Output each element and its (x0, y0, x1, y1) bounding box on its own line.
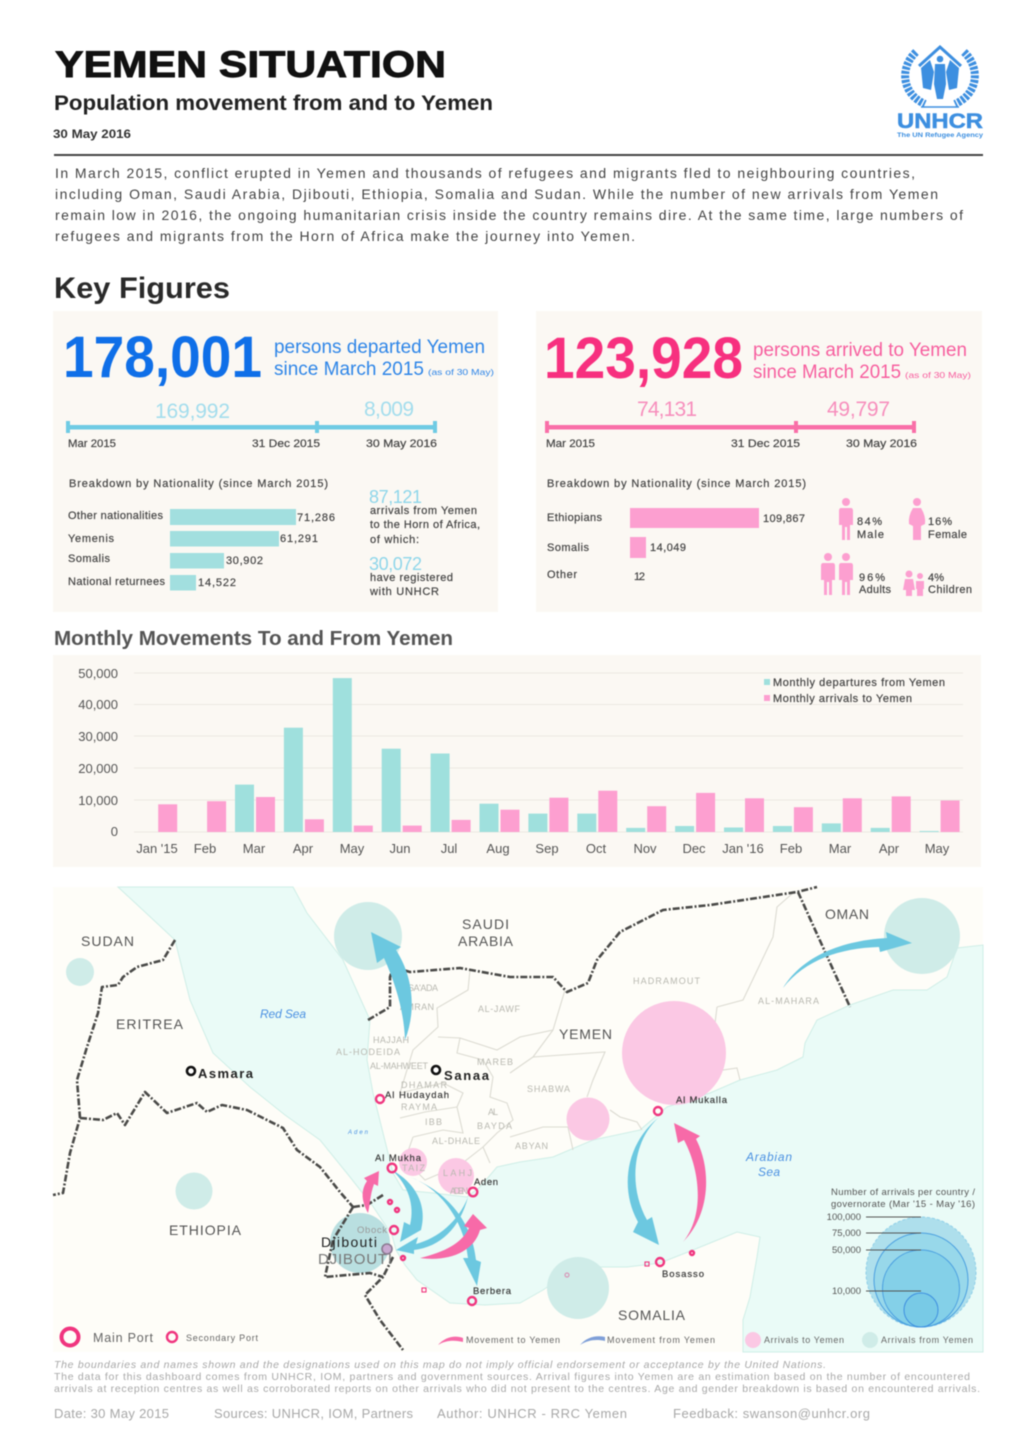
timeline: arrivals: 31 Dec 2015 (731, 438, 800, 450)
bars: monthly arrivals (158, 791, 960, 832)
y axis labels: 10,000 (78, 793, 118, 808)
port labels: Al Mukalla (676, 1095, 728, 1106)
bar chart: departures by nationality: 71,286 (297, 512, 335, 524)
sea labels: Red Sea (260, 1007, 306, 1021)
stat: male: Male (857, 529, 884, 541)
port labels: Bosasso (662, 1269, 704, 1280)
arrow: Bosasso to Al Mukalla (674, 1123, 706, 1242)
stat: female: Female (928, 529, 967, 541)
map legend: Movement to Yemen (466, 1335, 560, 1345)
country labels: OMAN (825, 906, 869, 922)
x axis labels: May (340, 841, 365, 856)
timeline: departures: 31 Dec 2015 (252, 438, 320, 450)
timeline: arrivals: 30 May 2016 (846, 438, 917, 450)
departed caption: persons departed Yemen (274, 337, 485, 358)
sea labels: Arabian (745, 1150, 792, 1164)
callout: Horn of Africa arrivals: 87,121 (369, 487, 422, 507)
bar chart: arrivals by nationality: Other (547, 569, 577, 581)
disclaimer notes: arrivals at reception centres as well as corroborated reports on other arrivals who did not present to the centres. Age and gender breakdown is based on encountered arrivals. (54, 1383, 980, 1395)
circle: Sudan departures (66, 958, 94, 986)
arrow: Berbera to Aden (420, 1214, 487, 1259)
x axis labels: Aug (486, 841, 510, 856)
governorate labels: ADEN (450, 1186, 468, 1196)
stat: adults (859, 572, 892, 596)
governorate labels (336, 976, 819, 1196)
panel: departures (53, 311, 498, 612)
x axis labels: Mar (829, 841, 852, 856)
capitals: Asmara (198, 1066, 254, 1081)
governorate labels: MAREB (477, 1057, 513, 1067)
bar chart: departures by nationality: Somalis (68, 553, 110, 565)
stat: children: Children (928, 584, 972, 596)
timeline: departures: 8,009 (364, 398, 414, 421)
callout: Horn of Africa arrivals: have registered (370, 572, 453, 584)
x axis labels: Nov (633, 841, 657, 856)
arrow: Al Mukalla to Bosasso (628, 1118, 659, 1245)
arrived caption (753, 340, 971, 383)
y axis labels: 20,000 (78, 761, 118, 776)
governorate labels: TAIZ (402, 1163, 426, 1173)
size legend: 50,000 (832, 1245, 861, 1256)
bar chart: arrivals by nationality: 109,867 (763, 513, 805, 525)
x axis labels: Jul (441, 841, 457, 856)
country labels: YEMEN (559, 1026, 612, 1042)
intro text: remain low in 2016, the ongoing humanitarian crisis inside the country remains dire. At the same time, large numbers of (55, 207, 963, 223)
capitals (187, 1066, 490, 1250)
circle: Saudi Arabia departures (334, 902, 402, 970)
bar chart: arrivals by nationality (547, 508, 805, 583)
size legend: 10,000 (832, 1286, 861, 1297)
port labels: Al Hudaydah (385, 1090, 449, 1101)
icon: adults (821, 553, 853, 595)
country labels: ARABIA (458, 933, 514, 949)
bar chart: departures by nationality: 14,522 (198, 577, 236, 589)
arrived caption: (as of 30 May) (905, 370, 971, 380)
map (53, 887, 983, 1352)
governorate labels: DHAMAR (401, 1080, 448, 1090)
callout: Horn of Africa arrivals: to the Horn of Africa, (370, 519, 480, 531)
title: YEMEN SITUATION (55, 44, 446, 85)
capitals: Sanaa (444, 1068, 490, 1083)
country labels: DJIBOUTI (318, 1251, 392, 1268)
x axis labels: Feb (780, 841, 802, 856)
map legend: Arrivals from Yemen (881, 1335, 973, 1345)
arrow: Djibouti to Al Mukha (363, 1171, 379, 1213)
governorate labels: SHABWA (527, 1084, 570, 1094)
capitals: Djibouti (321, 1234, 377, 1250)
circle: Shabwa arrivals (566, 1098, 610, 1140)
x axis labels: Jan '16 (722, 841, 764, 856)
arrow: Aden to Djibouti (396, 1197, 468, 1254)
footer credits: Date: 30 May 2015 (54, 1406, 169, 1421)
country labels: SUDAN (81, 933, 134, 949)
y axis labels: 50,000 (78, 666, 118, 681)
bar chart: arrivals by nationality: Ethiopians (547, 512, 602, 524)
x axis labels: Dec (682, 841, 706, 856)
country labels: ETHIOPIA (169, 1222, 242, 1238)
y axis labels (78, 666, 118, 839)
ports (376, 1095, 694, 1305)
port labels (357, 1090, 728, 1297)
x axis labels: Jan '15 (136, 841, 178, 856)
footer credits: Author: UNHCR - RRC Yemen (437, 1406, 627, 1421)
governorate labels: HAJJAH (373, 1035, 409, 1045)
circle: Lahj arrivals (438, 1158, 474, 1194)
governorate boundaries (400, 893, 793, 1180)
bar chart: departures by nationality: 61,291 (280, 533, 318, 545)
bar chart: departures by nationality (68, 509, 335, 590)
governorate labels: IBB (425, 1117, 442, 1127)
country labels: SAUDI (462, 916, 509, 932)
map legend: Main Port (93, 1331, 154, 1345)
timeline: departures: 30 May 2016 (366, 438, 437, 450)
size legend (827, 1187, 976, 1327)
arrived caption: persons arrived to Yemen (753, 340, 967, 361)
circle: Djibouti departures (330, 1213, 390, 1273)
stat: female: 16% (928, 516, 952, 528)
breakdown heading: Breakdown by Nationality (since March 2015) (547, 478, 806, 490)
x axis labels: Jun (390, 841, 410, 856)
governorate labels: AL-MAHWEET (370, 1061, 428, 1071)
chart legend (764, 677, 945, 705)
arrow: Yemen to Oman (783, 932, 912, 988)
timeline: arrivals: Mar 2015 (546, 438, 595, 450)
x axis labels: Apr (879, 841, 900, 856)
date: 30 May 2016 (53, 127, 131, 141)
bar chart: departures by nationality: Yemenis (68, 533, 114, 545)
departed caption: since March 2015 (274, 359, 424, 380)
y axis labels: 40,000 (78, 697, 118, 712)
callout: Horn of Africa arrivals: arrivals from Yemen (370, 505, 477, 517)
circle: Oman departures (884, 898, 960, 974)
size legend: 100,000 (827, 1212, 861, 1223)
x axis labels: Sep (535, 841, 559, 856)
sea labels: Sea (758, 1165, 780, 1179)
governorate labels: RAYMA (401, 1102, 437, 1112)
departed caption: (as of 30 May) (428, 367, 494, 377)
y axis labels: 30,000 (78, 729, 118, 744)
port labels: Berbera (473, 1286, 512, 1297)
chart legend: Monthly departures from Yemen (773, 677, 945, 689)
arrow: Al Mukha to Berbera (410, 1177, 481, 1286)
heading: monthly movements: Monthly Movements To and From Yemen (54, 628, 453, 650)
footer credits: Sources: UNHCR, IOM, Partners (214, 1406, 414, 1421)
chart legend: Monthly arrivals to Yemen (773, 693, 912, 705)
icon: UNHCR logo (897, 47, 983, 139)
stat: male: 84% (857, 516, 882, 528)
arrived caption: since March 2015 (753, 362, 901, 383)
intro text: including Oman, Saudi Arabia, Djibouti, Ethiopia, Somalia and Sudan. While the number of new arrivals from Yemen (55, 186, 938, 202)
x axis labels: Mar (243, 841, 266, 856)
x axis labels (136, 841, 950, 856)
country labels: SOMALIA (618, 1307, 686, 1323)
icon: male (839, 498, 853, 540)
circle: Ethiopia departures (176, 1172, 212, 1210)
governorate labels: LAHJ (443, 1168, 472, 1178)
circle: Taiz arrivals (399, 1148, 427, 1176)
icon: children (903, 570, 924, 596)
callout: Horn of Africa arrivals (369, 487, 480, 598)
callout: Horn of Africa arrivals: of which: (370, 534, 419, 546)
circle: Hadramout arrivals (622, 1001, 726, 1105)
x axis labels: Apr (293, 841, 314, 856)
circle: Somalia departures (547, 1257, 609, 1319)
arrow: Yemen to Saudi Arabia (371, 932, 412, 1040)
map legend: Arrivals to Yemen (764, 1335, 844, 1345)
governorate labels: HADRAMOUT (633, 976, 700, 986)
governorate labels: BAYDA (477, 1121, 512, 1131)
panel: arrivals (536, 311, 982, 612)
stat: adults: Adults (859, 584, 892, 596)
breakdown heading: Breakdown by Nationality (since March 2015) (69, 478, 328, 490)
bar chart: departures by nationality: Other nationalities (68, 510, 164, 522)
map legend (62, 1328, 973, 1348)
heading: key figures: Key Figures (54, 272, 230, 305)
footer credits: Feedback: swanson@unhcr.org (673, 1406, 870, 1421)
stat: adults: 96% (859, 572, 885, 584)
stat: female (928, 516, 967, 541)
borders (53, 887, 850, 1350)
timeline: arrivals: 49,797 (827, 398, 890, 421)
country labels (81, 906, 869, 1323)
intro text: refugees and migrants from the Horn of Africa make the journey into Yemen. (55, 228, 635, 244)
subtitle: Population movement from and to Yemen (54, 92, 493, 115)
sea labels (260, 1007, 792, 1179)
sea (118, 887, 983, 1352)
bar chart: arrivals by nationality: 14,049 (650, 542, 686, 554)
port labels: Obock (357, 1225, 387, 1236)
timeline: departures: 169,992 (155, 400, 230, 423)
stat: children (928, 572, 972, 596)
x axis labels: May (925, 841, 950, 856)
stat: children: 4% (928, 572, 944, 584)
arrow: Al Mukha to Djibouti (392, 1170, 423, 1242)
bars: monthly departures (235, 678, 939, 832)
governorate labels: AL (488, 1107, 498, 1117)
bar chart: arrivals by nationality: 12 (634, 571, 645, 583)
x axis labels: Feb (194, 841, 216, 856)
disclaimer notes: The boundaries and names shown and the designations used on this map do not imply official endorsement or acceptance by the United Nations. (54, 1359, 826, 1371)
callout: Horn of Africa arrivals: 30,072 (369, 554, 422, 574)
sea labels: Aden (347, 1130, 369, 1136)
timeline: arrivals: 74,131 (637, 398, 697, 421)
size legend: 75,000 (832, 1228, 861, 1239)
stat: male (857, 516, 884, 541)
panel: monthly chart (53, 655, 981, 867)
port labels: Al Mukha (375, 1153, 422, 1164)
port labels: Aden (474, 1177, 498, 1188)
governorate labels: AL-MAHARA (758, 996, 819, 1006)
bar chart: departures by nationality: National returnees (68, 576, 166, 588)
governorate labels: AL-DHALE (432, 1136, 480, 1146)
size legend: Number of arrivals per country / (831, 1187, 975, 1198)
total arrived: 123,928 (544, 326, 743, 391)
map legend: Movement from Yemen (607, 1335, 715, 1345)
governorate labels: AL-JAWF (478, 1004, 520, 1014)
governorate labels: SA'ADA (408, 983, 438, 993)
y axis labels: 0 (111, 824, 118, 839)
size legend: governorate (Mar '15 - May '16) (831, 1199, 975, 1210)
footer credits (54, 1406, 870, 1421)
bar chart: arrivals by nationality: Somalis (547, 542, 590, 554)
disclaimer notes (54, 1359, 980, 1395)
x axis labels: Oct (586, 841, 606, 856)
icon: female (909, 498, 925, 540)
disclaimer notes: The data for this dashboard comes from UNHCR, IOM, partners and government sources. Arrival figures into Yemen are an estimation based on the number of encountered (54, 1371, 970, 1383)
timeline: arrivals (545, 398, 917, 450)
departed caption (274, 337, 494, 380)
country labels: ERITREA (116, 1016, 184, 1032)
callout: Horn of Africa arrivals: with UNHCR (369, 586, 439, 598)
intro text: In March 2015, conflict erupted in Yemen and thousands of refugees and migrants fled to neighbouring countries, (55, 165, 915, 181)
map legend: Secondary Port (186, 1333, 258, 1343)
total departed: 178,001 (63, 325, 262, 390)
timeline: departures (66, 398, 437, 450)
icon: UNHCR logo: The UN Refugee Agency (897, 132, 983, 139)
governorate labels: AL-HODEIDA (336, 1047, 400, 1057)
timeline: departures: Mar 2015 (68, 438, 116, 450)
icon: UNHCR logo: UNHCR (897, 110, 983, 133)
bar chart: departures by nationality: 30,902 (226, 555, 263, 567)
governorate labels: AMRAN (400, 1002, 434, 1012)
intro text (55, 165, 963, 244)
governorate labels: ABYAN (515, 1141, 548, 1151)
